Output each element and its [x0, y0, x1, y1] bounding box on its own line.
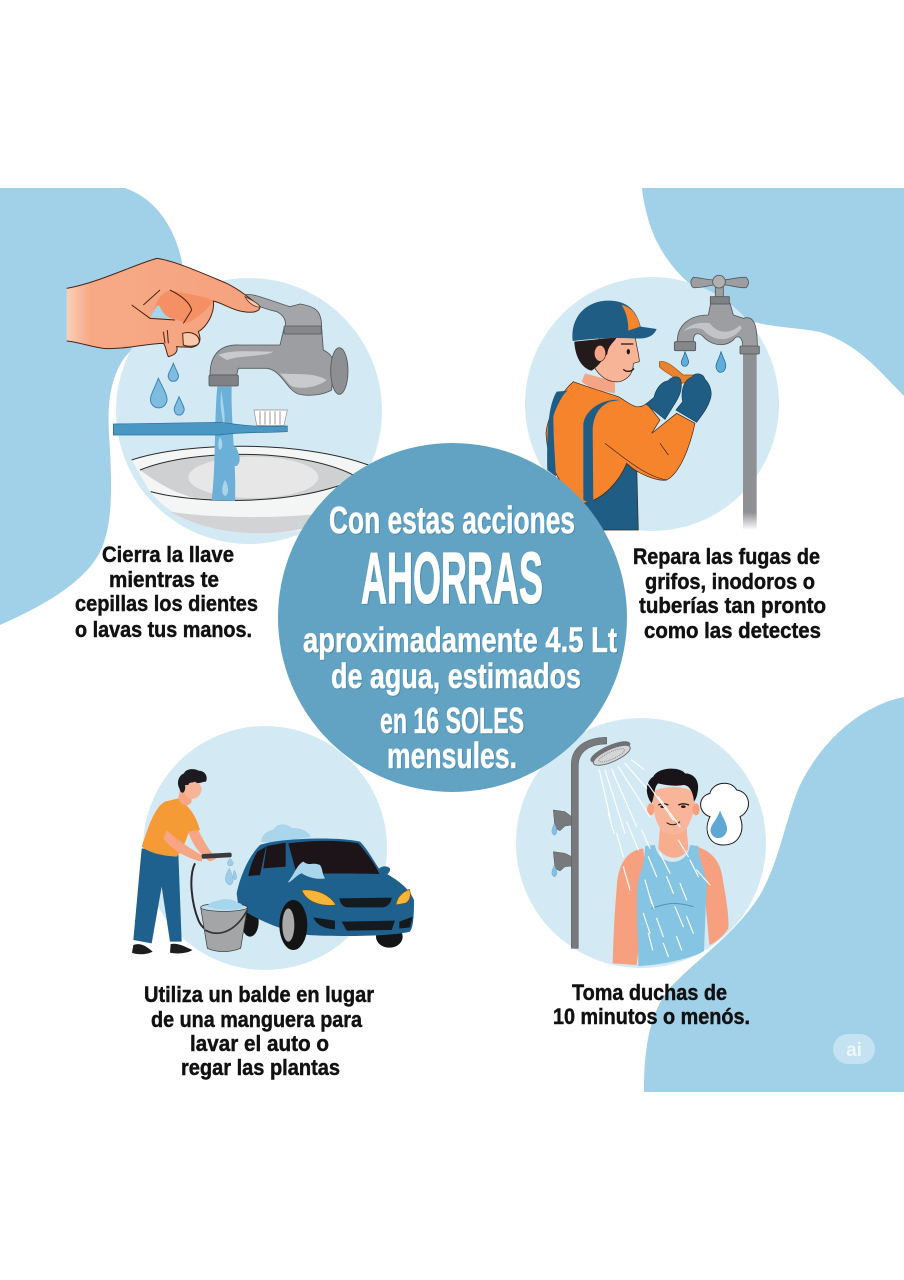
water stream: [212, 387, 240, 501]
caption: faucet: cepillas los dientes: [75, 591, 258, 616]
wall faucet: [674, 275, 759, 354]
toothbrush: [113, 410, 287, 435]
circle backdrop: car scene: [143, 726, 387, 970]
caption: repair: como las detectes: [644, 618, 821, 643]
caption: shower: 10 minutos o menós.: [553, 1004, 750, 1029]
caption: faucet: Cierra la llave: [102, 542, 234, 567]
headline text: en 16 SOLES: [380, 700, 524, 741]
illustration: man in the shower: [552, 737, 748, 966]
center circle with savings message: [278, 443, 627, 792]
plumber body: [546, 382, 695, 530]
water drops: [150, 363, 184, 415]
caption: repair: tuberías tan pronto: [639, 593, 826, 618]
ai badge: [833, 1034, 875, 1064]
headline text: mensules.: [387, 735, 517, 776]
caption: car: de una manguera para: [151, 1007, 363, 1032]
caption: faucet: [75, 542, 258, 642]
car: [237, 838, 414, 950]
sink: [132, 446, 368, 533]
caption: faucet: o lavas tus manos.: [75, 617, 252, 642]
illustration: hand closing faucet over sink: [67, 258, 368, 533]
background blob: bottom right: [644, 697, 904, 1092]
caption: repair: [633, 544, 826, 643]
pipe: [743, 353, 757, 530]
headline text: Con estas acciones: [329, 500, 575, 542]
foam on roof: [262, 825, 310, 842]
headline text: de agua, estimados: [331, 657, 581, 696]
background blob: top left: [0, 188, 183, 625]
circle backdrop: shower scene: [516, 718, 766, 968]
headline text: aproximadamente 4.5 Lt: [303, 621, 617, 660]
bucket: [201, 899, 247, 952]
thought bubble with drop: [701, 783, 748, 845]
headline text: [303, 500, 617, 776]
caption: car: [144, 982, 374, 1080]
gloves and wrench: [646, 361, 711, 422]
caption: shower: Toma duchas de: [572, 980, 727, 1005]
background blob: top right: [642, 188, 904, 396]
faucet: [209, 294, 348, 395]
caption: shower: [553, 980, 750, 1029]
caption: car: lavar el auto o: [190, 1031, 329, 1056]
illustration: plumber repairing faucet: [546, 275, 759, 530]
hand: [67, 258, 260, 357]
caption: car: Utiliza un balde en lugar: [144, 982, 374, 1007]
foam on hood: [288, 862, 325, 883]
man washing car: [132, 769, 232, 954]
drops from faucet: [681, 352, 726, 372]
ai badge: ai: [846, 1040, 862, 1061]
drips on handles: [552, 823, 557, 877]
man: [613, 769, 729, 966]
shower column: [553, 737, 607, 948]
hose: [191, 863, 247, 933]
caption: faucet: mientras te: [109, 567, 219, 592]
illustration: washing car with bucket: [132, 769, 414, 954]
caption: repair: grifos, inodoros o: [645, 569, 815, 594]
circle backdrop: faucet scene: [116, 278, 382, 544]
plumber head: [572, 301, 657, 393]
caption: repair: Repara las fugas de: [633, 544, 820, 569]
caption: car: regar las plantas: [181, 1055, 340, 1080]
shower head: [588, 737, 634, 770]
water streaks: [599, 760, 710, 957]
water drops from hose: [225, 858, 237, 885]
circle backdrop: repair scene: [525, 277, 779, 531]
headline text: AHORRAS: [361, 539, 543, 619]
